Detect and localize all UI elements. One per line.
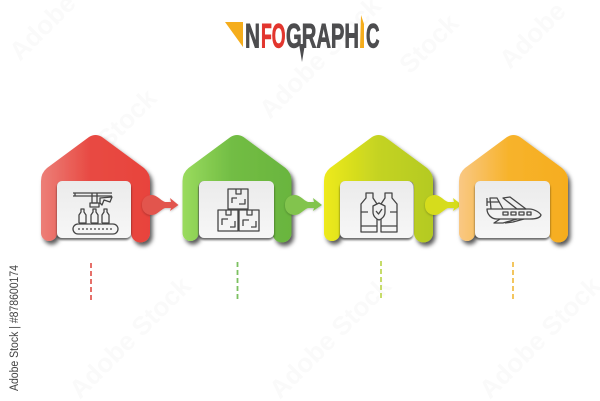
title letter C: C xyxy=(366,18,380,56)
panel: step 4 icon tile xyxy=(475,181,550,238)
dashed leader: step 3 xyxy=(380,261,382,298)
watermark pattern: Adobe Stock xyxy=(63,270,197,401)
watermark pattern: Stock xyxy=(91,83,163,154)
icon: factory conveyor xyxy=(73,193,118,234)
step 4 house xyxy=(459,135,568,242)
R tail spike xyxy=(299,44,305,62)
step 3 house xyxy=(324,135,433,242)
title letters GRAPH: GRAPH xyxy=(286,18,359,56)
dashed leader: step 2 xyxy=(236,262,238,300)
step 1 arrow xyxy=(142,195,178,215)
title letter I spike xyxy=(360,15,364,48)
dashed leader: step 1 xyxy=(90,263,92,300)
panel: step 1 icon tile xyxy=(57,181,131,238)
icon: bottles with shield xyxy=(361,193,397,232)
step 3 arrow xyxy=(425,195,462,215)
title accent triangle xyxy=(225,22,243,47)
step 2 house xyxy=(182,135,292,242)
dashed leader: step 4 xyxy=(512,262,514,300)
step 1 house xyxy=(41,135,150,242)
title letters FO: FO xyxy=(261,18,286,56)
watermark pattern: Stock xyxy=(393,8,465,79)
icon: airplane xyxy=(487,197,541,223)
panel: step 3 icon tile xyxy=(340,181,413,238)
stock id caption: Adobe Stock | #878600174 xyxy=(9,264,21,391)
icon: stacked boxes xyxy=(218,189,259,231)
title xyxy=(225,15,380,62)
panel: step 2 icon tile xyxy=(199,181,274,238)
step 2 arrow xyxy=(285,195,322,215)
watermark pattern: Adobe Stock xyxy=(263,270,397,401)
title letter N: N xyxy=(245,18,260,56)
